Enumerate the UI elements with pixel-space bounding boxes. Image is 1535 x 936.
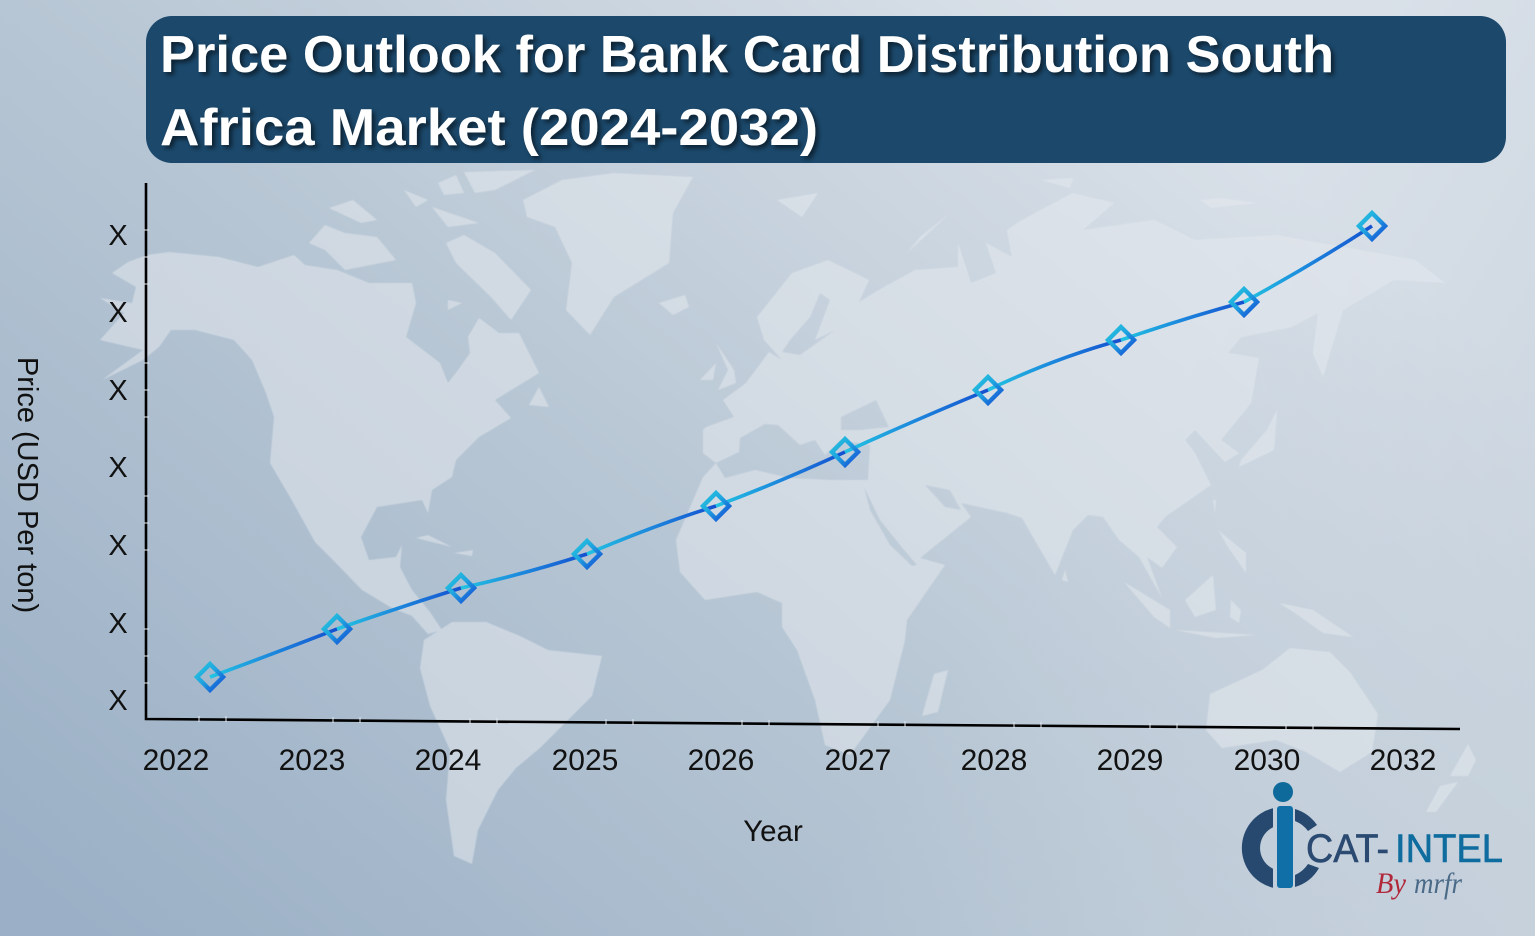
y-axis title: Price (USD Per ton) [11, 357, 43, 613]
x-axis tick labels: 2023 [279, 744, 345, 777]
logo: CAT-INTEL by mrfr [1242, 782, 1503, 900]
map: Australia [1206, 648, 1378, 772]
map: European and Russian islands [700, 178, 1257, 390]
title text: Price Outlook for Bank Card Distribution South [160, 26, 1334, 84]
logo tagline: mrfr [1414, 867, 1462, 900]
y-axis tick labels [108, 220, 128, 717]
map: Japan and Sakhalin [1239, 360, 1277, 467]
y-axis tick labels: X [108, 220, 128, 252]
x-axis tick labels: 2024 [415, 744, 481, 777]
x-axis title: Year [743, 815, 803, 848]
data markers [197, 213, 1385, 690]
map: New Zealand [1426, 744, 1476, 812]
map: South-East Asian islands [1062, 500, 1353, 638]
map: Greenland [523, 173, 693, 335]
logo tagline: By [1376, 867, 1407, 900]
map: Iceland [659, 295, 689, 315]
map: Africa and Eurasia [676, 193, 1445, 755]
title banner [146, 16, 1506, 163]
y-axis tick labels: X [108, 297, 128, 329]
x-axis tick labels: 2022 [143, 744, 209, 777]
map: Newfoundland and Caribbean [416, 387, 549, 556]
y-axis tick labels: X [108, 685, 128, 717]
map: Canadian Arctic islands [309, 170, 535, 320]
x-axis tick labels [143, 744, 1436, 777]
logo wordmark: CAT- [1306, 827, 1389, 871]
logo wordmark: INTEL [1395, 827, 1503, 871]
logo tagline [1376, 867, 1462, 900]
x-axis tick labels: 2032 [1370, 744, 1436, 777]
y-axis tick labels: X [108, 608, 128, 640]
x-axis tick labels: 2030 [1234, 744, 1300, 777]
x-axis tick labels: 2025 [552, 744, 618, 777]
title text: Africa Market (2024-2032) [160, 99, 818, 157]
logo wordmark [1306, 827, 1503, 871]
map: South America [420, 622, 602, 864]
x-axis tick labels: 2029 [1097, 744, 1163, 777]
x-axis tick labels: 2026 [688, 744, 754, 777]
x-axis tick labels: 2028 [961, 744, 1027, 777]
line chart [11, 183, 1460, 848]
map: North America [100, 252, 539, 634]
title text [160, 26, 1334, 157]
y-axis tick labels: X [108, 530, 128, 562]
x-axis tick labels: 2027 [825, 744, 891, 777]
world map backdrop [100, 170, 1476, 864]
map: Madagascar [922, 670, 948, 716]
logo icon [1242, 782, 1319, 888]
y-axis tick labels: X [108, 452, 128, 484]
y-axis tick labels: X [108, 375, 128, 407]
data line [210, 226, 1372, 677]
chart axes [144, 183, 1460, 730]
